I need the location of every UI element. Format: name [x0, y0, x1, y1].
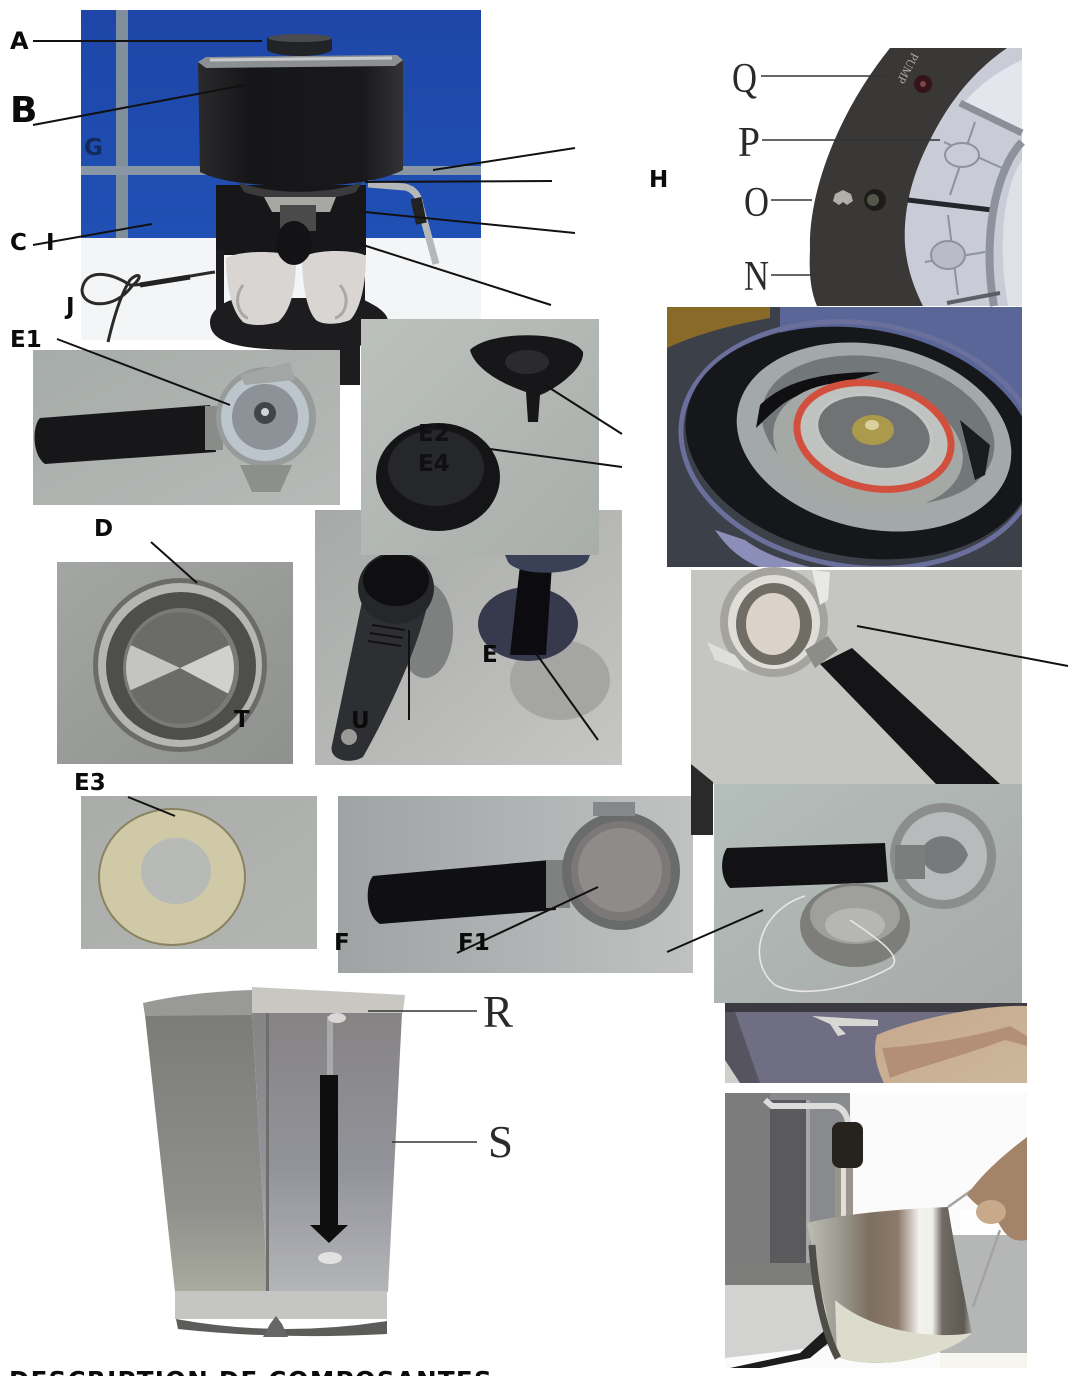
heading labels: main machine: J [64, 294, 75, 320]
heading labels: main machine: H [649, 167, 668, 193]
milk jug [807, 1207, 972, 1363]
F handle [368, 860, 556, 924]
component labels: F [334, 930, 350, 956]
portafilter head [720, 567, 828, 677]
component labels: U [351, 708, 370, 734]
panel: steaming milk in a jug [725, 1093, 1027, 1368]
leader: D [151, 542, 197, 583]
panel: hand on coffee machine [725, 1003, 1027, 1083]
panel: gasket washer E3 [81, 796, 317, 949]
machine water tank body [198, 60, 403, 186]
heading labels: main machine: C [10, 230, 27, 256]
E1 handle [35, 405, 216, 464]
component labels: E1 [10, 327, 42, 353]
machine steam wand [368, 184, 436, 264]
panel: opened portafilter with basket [714, 784, 1022, 1003]
panel: scoop and tamper [315, 510, 622, 765]
panel: funnel and cap [361, 319, 599, 555]
tamper shadow [510, 640, 610, 720]
brass screw [852, 415, 894, 445]
panel: gasket and shower head [667, 307, 1022, 567]
machine column [216, 185, 366, 255]
leader: F1 [457, 887, 598, 953]
heading labels: main machine: B [10, 90, 37, 131]
cup left [226, 252, 296, 325]
machine base [210, 298, 388, 350]
tank water glow [318, 1252, 342, 1264]
hand [967, 1137, 1027, 1241]
panel: control dial detail [810, 48, 1022, 306]
wire spring [759, 896, 894, 991]
portafilter handle [820, 648, 1000, 784]
leader: basket [667, 910, 763, 952]
machine handle [276, 221, 312, 265]
open handle [722, 843, 888, 888]
dial labels: P [738, 120, 760, 166]
panel: control dial detail: PUMP [894, 51, 922, 86]
tank arrow [310, 1075, 348, 1243]
component labels: T [234, 707, 250, 733]
dial indicator lamps [914, 75, 932, 93]
component labels: E3 [74, 770, 106, 796]
panel: portafilter side photo [691, 567, 1022, 835]
tamper top disc [505, 555, 590, 573]
heading labels: main machine: A [10, 27, 29, 55]
leader: E3 [128, 797, 175, 816]
leader: E1 [57, 339, 230, 405]
component labels: E [482, 642, 498, 668]
heading labels: main machine [10, 27, 668, 320]
heading labels: main machine: G [84, 135, 103, 161]
component labels: D [94, 516, 113, 542]
fingers [875, 1006, 1027, 1083]
tank labels [368, 987, 513, 1167]
dial labels [732, 56, 940, 300]
dial labels: O [744, 180, 769, 226]
scoop shadow [397, 582, 453, 678]
machine lid knob [267, 34, 332, 56]
steam grip [832, 1122, 863, 1168]
machine group head [238, 182, 362, 200]
leaders: scoop and tamper [409, 630, 598, 740]
basket D rim [93, 578, 267, 752]
power cord J [82, 272, 215, 342]
jug handle [948, 1190, 1000, 1307]
leader lines on main photo [33, 41, 575, 305]
tank labels: R [483, 987, 513, 1037]
open head [890, 803, 996, 909]
panel: main photo of the espresso machine [81, 10, 481, 385]
E1 basket [216, 367, 316, 467]
cap [376, 423, 500, 531]
dial labels: Q [732, 56, 757, 102]
panel: portafilter E1 [33, 350, 340, 505]
drip tray [725, 1263, 815, 1285]
red gasket ring [793, 379, 955, 493]
machine side [725, 1093, 850, 1263]
dial labels: N [744, 254, 769, 300]
leaders: funnel and cap [490, 385, 622, 467]
panel: water tank [143, 987, 405, 1337]
panel: portafilter F [338, 796, 693, 973]
heading labels: main machine: I [46, 230, 55, 256]
panel: filter basket D [57, 562, 293, 764]
basket D plate highlights [126, 645, 234, 694]
F basket [562, 812, 680, 930]
component labels [10, 327, 498, 956]
tamper base disc [478, 587, 578, 661]
scoop [332, 597, 428, 761]
tank labels: S [488, 1117, 513, 1167]
steam arm [765, 1100, 848, 1122]
tamper stem [510, 565, 552, 655]
component labels: F1 [458, 930, 490, 956]
component labels: E2 [418, 421, 450, 447]
funnel [470, 335, 583, 422]
cup right [302, 251, 366, 324]
shower screen [818, 396, 930, 468]
component labels: E4 [418, 451, 450, 477]
removed basket [800, 883, 910, 967]
leader: portafilter side [857, 626, 1068, 666]
